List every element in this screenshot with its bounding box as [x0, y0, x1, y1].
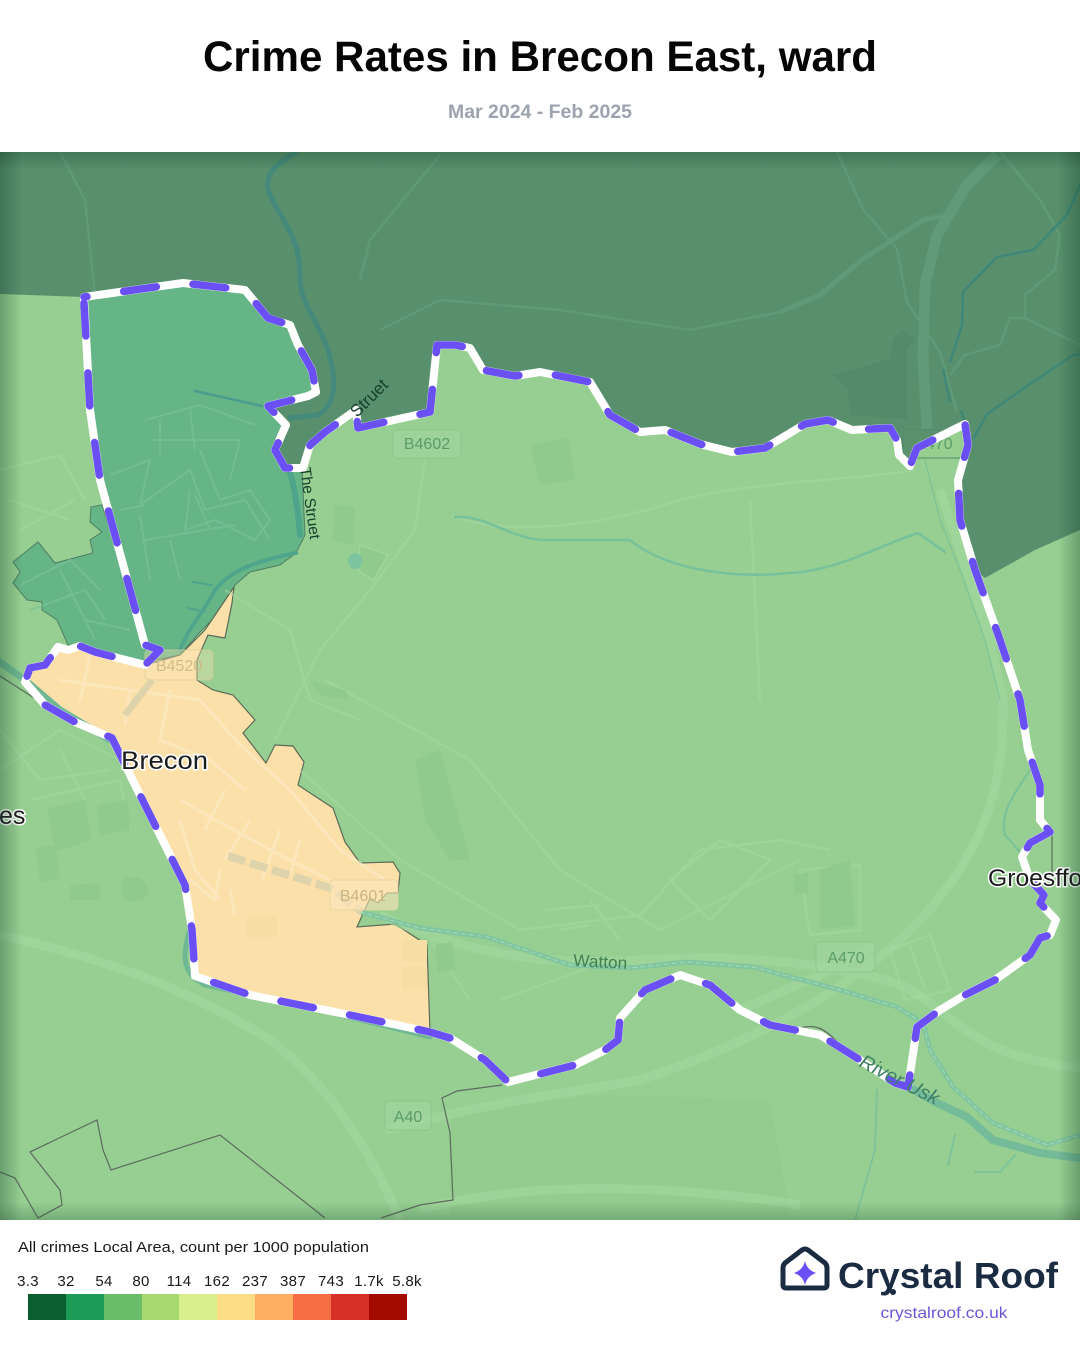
shield: B4601	[330, 880, 398, 910]
buildings	[418, 940, 427, 962]
legend tick values: 80	[132, 1273, 150, 1290]
shield: B4520	[145, 650, 213, 680]
label: Brecon: Brecon	[121, 747, 208, 775]
streets in Brecon town	[60, 655, 385, 915]
legend title: All crimes Local Area, count per 1000 population	[18, 1239, 369, 1256]
logo key loop on y	[890, 1289, 896, 1295]
roads inside low crime area	[20, 405, 270, 640]
main road A470 and A40	[389, 924, 924, 1208]
area: bottom field tint	[450, 1095, 790, 1215]
roads on dark north band	[60, 152, 1080, 412]
legend tick values: 3.3	[17, 1273, 39, 1290]
pond	[348, 553, 362, 569]
map edge vignette	[0, 152, 1080, 1220]
logo wordmark: Crystal Roof	[838, 1255, 1059, 1296]
legend tick values	[17, 1273, 422, 1290]
title: Crime Rates in Brecon East, ward	[203, 33, 877, 81]
legend tick values: 1.7k	[354, 1273, 384, 1290]
area: lowest crime north band	[0, 152, 1080, 578]
legend	[17, 1239, 422, 1320]
icon: house with star	[783, 1249, 827, 1288]
area: low crime north Brecon	[13, 283, 316, 665]
legend tick values: 743	[318, 1273, 344, 1290]
shield: A40	[385, 1101, 431, 1130]
fields and building footprints	[123, 544, 850, 970]
road A470 in dark band	[923, 155, 997, 429]
shield: B4520: B4520	[156, 658, 202, 675]
label: The Struet road: The Struet	[296, 466, 323, 541]
shield: A470 north: A470	[915, 436, 953, 453]
neighbouring ward boundaries	[0, 676, 1052, 1218]
shield: B4602: B4602	[404, 436, 450, 453]
boundary white casing	[25, 283, 1056, 1087]
shield: A40: A40	[394, 1109, 422, 1126]
area: higher crime Brecon town centre	[25, 587, 430, 1032]
roads on medium area	[224, 589, 302, 774]
map base: medium crime area	[0, 294, 1080, 1220]
river: The Struet ravine	[180, 152, 334, 650]
railway remnant in Brecon town	[125, 680, 362, 912]
legend tick values: 114	[167, 1273, 191, 1290]
legend tick values: 387	[280, 1273, 306, 1290]
shield: B4601: B4601	[340, 888, 386, 905]
shield: A470 south: A470	[827, 950, 865, 967]
map labels	[0, 375, 1080, 1110]
label: River Usk: River Usk	[856, 1051, 944, 1110]
panel: choropleth map	[0, 152, 1080, 1220]
legend tick values: 54	[95, 1273, 113, 1290]
legend tick values: 5.8k	[392, 1273, 422, 1290]
rivers and canal on medium area	[0, 460, 1080, 1220]
legend colour scale	[28, 1294, 407, 1320]
shield: B4602	[393, 430, 461, 458]
label: Struet road: Struet	[346, 375, 392, 421]
logo: Crystal Roof	[783, 1249, 1059, 1322]
area: darker woodland patch	[833, 330, 915, 419]
legend tick values: 32	[57, 1273, 75, 1290]
subtitle: date range: Mar 2024 - Feb 2025	[448, 102, 632, 123]
legend tick values: 162	[204, 1273, 230, 1290]
boundary purple dashes	[25, 283, 1056, 1087]
legend tick values: 237	[242, 1273, 268, 1290]
streams in dark band	[943, 185, 1080, 439]
shield: A470 south	[816, 942, 875, 972]
ward boundary: Brecon East	[25, 283, 1056, 1087]
shield: A470 north	[903, 430, 965, 458]
logo website: crystalroof.co.uk	[880, 1305, 1009, 1322]
label: Watton: Watton	[573, 951, 628, 973]
road shields	[145, 430, 965, 1130]
